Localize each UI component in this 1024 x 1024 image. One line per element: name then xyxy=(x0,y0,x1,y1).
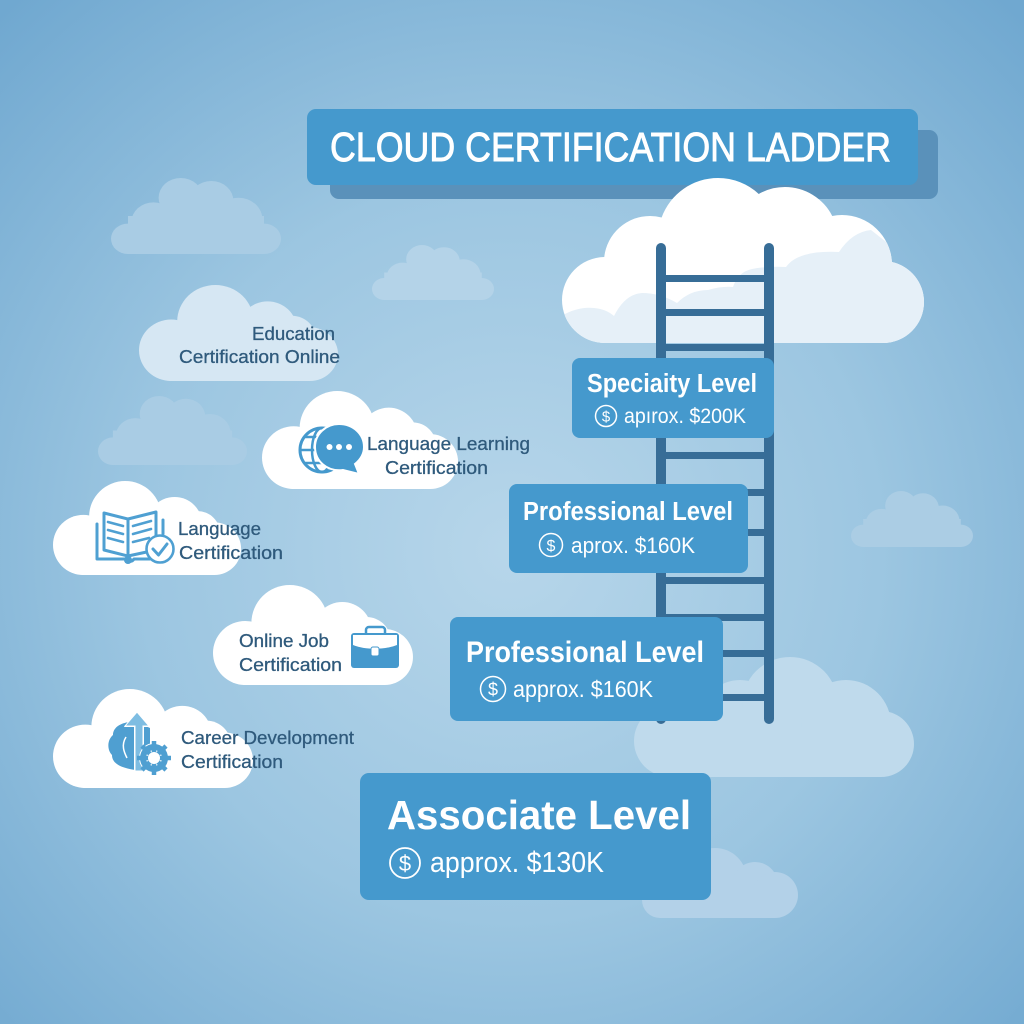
icon: dollar coin: $ xyxy=(602,408,611,426)
panel: professional level lower xyxy=(450,617,723,721)
panel: online job cloud: Certification xyxy=(239,654,342,675)
cloud: bottom xyxy=(642,848,798,918)
panel: specialty level: apırox. $200K xyxy=(624,405,746,428)
panel: language learning cloud xyxy=(262,391,530,489)
panel: associate level xyxy=(360,773,711,900)
icon: briefcase xyxy=(351,627,399,668)
cloud: behind ladder base xyxy=(634,657,914,777)
panel: language learning cloud: Certification xyxy=(385,457,488,478)
icon: dollar coin xyxy=(596,406,616,426)
panel: professional level lower: Professional Level xyxy=(466,636,704,669)
icon: globe and speech bubble xyxy=(300,424,364,474)
panel: specialty level xyxy=(572,358,774,438)
panel: professional level upper: aprox. $160K xyxy=(571,533,695,558)
icon: dollar coin xyxy=(390,848,420,878)
icon: dollar coin: $ xyxy=(488,680,498,700)
icon: dollar coin: $ xyxy=(399,851,411,876)
panel: online job cloud xyxy=(213,585,413,685)
panel: professional level upper: Professional Level xyxy=(523,498,733,526)
panel: associate level: approx. $130K xyxy=(430,847,605,879)
icon: dollar coin: $ xyxy=(547,538,556,555)
panel: education cloud: Education xyxy=(252,323,335,344)
cloud: faint top left xyxy=(111,178,281,254)
cloud: faint mid left xyxy=(98,396,247,465)
panel: education cloud xyxy=(139,285,340,381)
cloud: large top cloud xyxy=(562,178,924,343)
icon: brain, arrow and gear xyxy=(108,711,171,775)
panel: language learning cloud: Language Learning xyxy=(367,433,530,454)
cloud: faint right xyxy=(851,491,973,547)
panel: specialty level: Speciaity Level xyxy=(587,370,757,398)
icon: dollar coin xyxy=(540,534,562,556)
panel: career development cloud: Certification xyxy=(181,751,283,772)
title banner: CLOUD CERTIFICATION LADDER xyxy=(330,124,891,170)
panel: education cloud: Certification Online xyxy=(179,346,340,367)
panel: online job cloud: Online Job xyxy=(239,630,329,651)
panel: language certification cloud: Language xyxy=(178,518,261,539)
panel: language certification cloud xyxy=(53,481,283,575)
title banner xyxy=(307,109,938,199)
panel: career development cloud xyxy=(53,689,354,788)
panel: associate level: Associate Level xyxy=(387,792,691,838)
panel: professional level lower: approx. $160K xyxy=(513,676,654,702)
icon: open book with check xyxy=(97,512,174,564)
cloud: faint small centre xyxy=(372,245,494,300)
ladder xyxy=(656,243,774,724)
panel: career development cloud: Career Development xyxy=(181,727,354,748)
panel: language certification cloud: Certification xyxy=(179,542,283,563)
panel: professional level upper xyxy=(509,484,748,573)
icon: dollar coin xyxy=(480,676,506,702)
